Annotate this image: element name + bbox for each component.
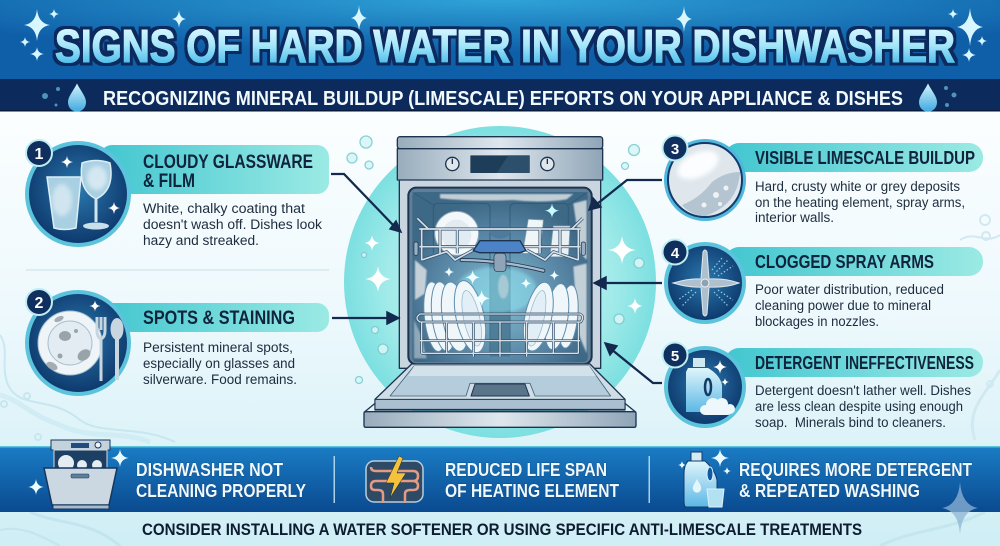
recommendation footer: CONSIDER INSTALLING A WATER SOFTENER OR USING SPECIFIC ANTI-LIMESCALE TREATMENTS [142, 520, 862, 539]
heading: CLOGGED SPRAY ARMS [755, 251, 934, 272]
panel: clogged spray arms [662, 240, 983, 330]
upper cups [523, 219, 543, 253]
number badge 1 [26, 140, 52, 166]
background [0, 110, 1000, 546]
dishwasher drawing in 3x coordinates [364, 137, 636, 427]
control panel [397, 149, 603, 180]
tumbler [47, 177, 81, 230]
number badge 2: 2 [35, 295, 44, 312]
arrow: spots to dishwasher [332, 312, 399, 324]
water swirl left [0, 335, 175, 442]
number badge 2 [26, 289, 52, 315]
header sparkles [20, 5, 987, 62]
header banner [0, 0, 1000, 80]
effect label 2 [445, 459, 619, 501]
effect label 1: CLEANING PROPERLY [136, 480, 306, 501]
bottom effects band [0, 440, 1000, 534]
decorative large sparkle [942, 482, 978, 534]
effect label 2: REDUCED LIFE SPAN [445, 459, 607, 480]
limescale deposits [414, 194, 587, 358]
open door [364, 364, 636, 427]
panel: spots and staining [25, 289, 329, 396]
arrow: spray arms to dishwasher [594, 277, 662, 289]
panel: visible limescale [662, 136, 983, 226]
body text: Detergent doesn't lather well. Dishes [755, 383, 971, 399]
heading pill [725, 348, 983, 377]
icon: limescale texture [664, 139, 746, 221]
body text: are less clean despite using enough [755, 399, 963, 415]
number badge 1: 1 [35, 146, 44, 163]
subtitle band [0, 79, 1000, 112]
heading: CLOUDY GLASSWARE [143, 151, 313, 173]
interior frame [408, 188, 592, 364]
body text: Persistent mineral spots, [143, 340, 293, 356]
blue spray hub [473, 241, 526, 253]
body text: on the heating element, spray arms, [755, 195, 965, 211]
body text: especially on glasses and [143, 356, 295, 372]
spoon [110, 318, 124, 340]
body text: Hard, crusty white or grey deposits [755, 179, 960, 195]
body text: interior walls. [755, 210, 834, 226]
icon: spray arm [664, 242, 746, 324]
body text: blockages in nozzles. [755, 314, 879, 330]
heading pill [725, 143, 983, 172]
heading pill [725, 247, 983, 276]
interior cavity [412, 192, 588, 362]
panel: cloudy glassware [25, 140, 329, 249]
sparkles inside [444, 203, 559, 307]
lower plates right [518, 280, 581, 354]
footer water swirls [0, 512, 985, 546]
heading line 2: & FILM [143, 170, 195, 192]
decorative bubbles and sparkles [347, 136, 644, 384]
teal backdrop circle [344, 126, 656, 438]
effect label 1 [136, 459, 306, 501]
body text [755, 383, 971, 431]
body text: hazy and streaked. [143, 233, 259, 249]
body text [143, 340, 297, 388]
body text [755, 179, 965, 226]
back wall panels [412, 192, 588, 353]
icon: detergent bottle and cup [678, 449, 731, 507]
body text: White, chalky coating that [143, 201, 305, 217]
arrow: limescale to dishwasher [589, 180, 662, 210]
lower plates left [421, 278, 491, 355]
body text: Poor water distribution, reduced [755, 282, 944, 298]
fork [97, 317, 105, 381]
panel: detergent ineffectiveness [662, 342, 983, 431]
panel: left column divider [26, 270, 329, 271]
number badge 5 [662, 342, 688, 368]
icon: right water drop [919, 84, 956, 112]
effect label 3: & REPEATED WASHING [739, 480, 920, 501]
wine glass [81, 160, 111, 199]
spray arm [462, 260, 543, 271]
icon: dishwasher [28, 440, 129, 509]
heading pill [100, 303, 329, 332]
cabinet body [399, 178, 601, 368]
heading: SPOTS & STAINING [143, 307, 295, 329]
glow [457, 267, 537, 313]
number badge 4: 4 [671, 245, 680, 262]
icon: detergent bottle [664, 346, 746, 428]
water swirl right [960, 215, 1000, 440]
icon: cloudy glasses [25, 141, 131, 247]
upper plate [435, 211, 479, 255]
number badge 3 [662, 136, 688, 160]
number badge 5: 5 [671, 348, 679, 365]
heading pill [100, 145, 329, 194]
body text: silverware. Food remains. [143, 372, 297, 388]
body text: cleaning power due to mineral [755, 298, 931, 314]
arrow: cloudy glassware to dishwasher [331, 174, 401, 232]
cabinet top trim [397, 137, 603, 149]
body text: soap. Minerals bind to cleaners. [755, 415, 946, 431]
icon: heating element [366, 456, 423, 503]
icon: left water drop [42, 84, 86, 112]
panel: central dishwasher [344, 126, 656, 438]
effect label 1: DISHWASHER NOT [136, 459, 283, 480]
body text [143, 201, 323, 249]
body text [755, 282, 944, 330]
number badge 4 [662, 240, 688, 264]
effect label 2: OF HEATING ELEMENT [445, 480, 619, 501]
number badge 3: 3 [671, 141, 679, 158]
subtitle: RECOGNIZING MINERAL BUILDUP (LIMESCALE) EFFORTS ON YOUR APPLIANCE & DISHES [103, 87, 903, 110]
arrow: detergent to dishwasher [605, 343, 662, 383]
upper rack [417, 218, 583, 260]
effect label 3 [739, 459, 972, 501]
lower rack [417, 314, 583, 357]
body text: doesn't wash off. Dishes look [143, 217, 323, 233]
icon: spotted plate and cutlery [25, 290, 131, 396]
